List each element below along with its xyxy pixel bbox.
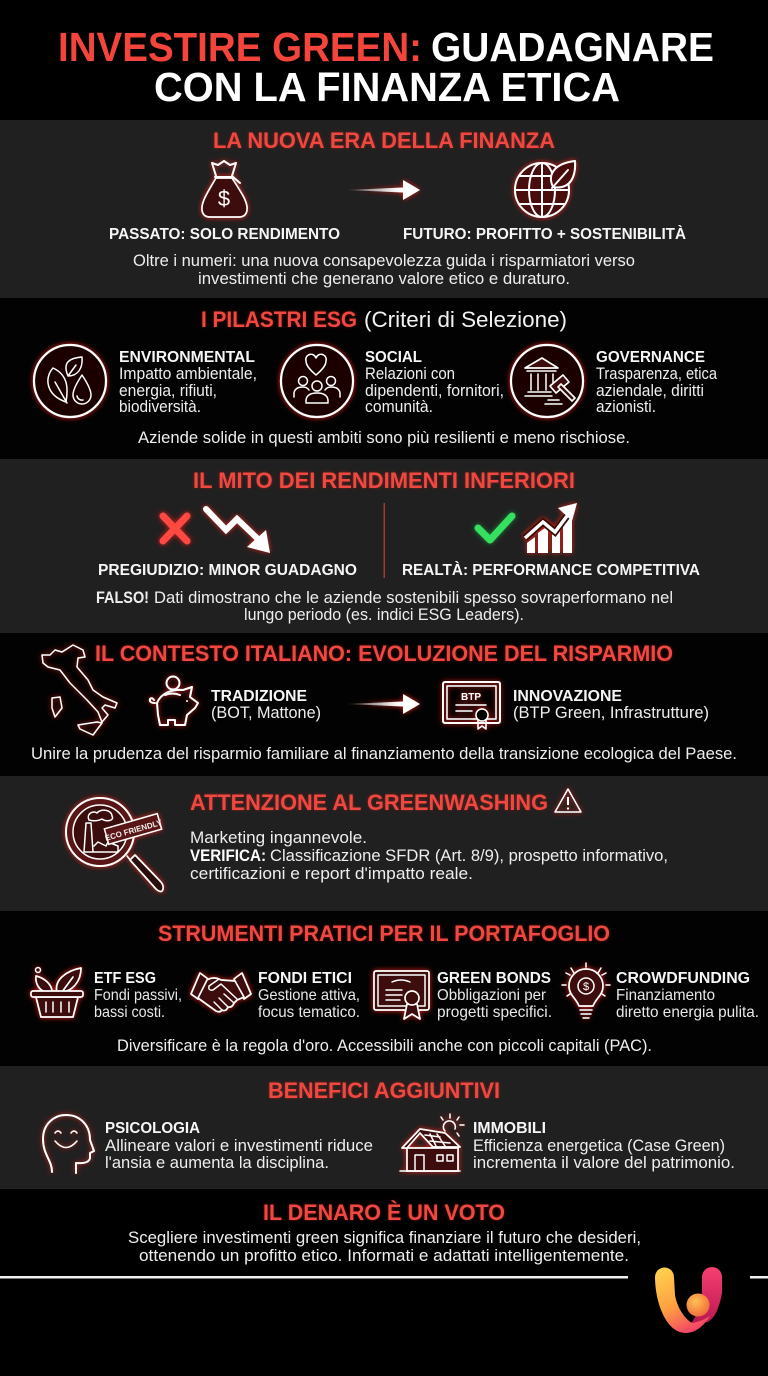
text block: falso: lungo periodo (es. indici ESG Leaders). bbox=[244, 606, 524, 624]
text block: environmental: energia, rifiuti, bbox=[119, 382, 217, 400]
icon: magnifier with fake label: ECO FRIENDLY bbox=[104, 818, 164, 843]
text block: falso: Dati dimostrano che le aziende sostenibili spesso sovraperformano nel bbox=[154, 589, 673, 607]
text block: governance: aziendale, diritti bbox=[596, 382, 704, 400]
text block: social: comunità. bbox=[365, 398, 433, 416]
text block: greenwashing bbox=[190, 829, 668, 883]
arrow: tradition to innovation bbox=[347, 694, 420, 714]
text block: immobili bbox=[473, 1120, 735, 1172]
text block: etf esg bbox=[94, 970, 182, 1021]
title: INVESTIRE GREEN: bbox=[58, 24, 422, 70]
icon: environmental bbox=[34, 345, 106, 417]
text block: falso bbox=[96, 589, 673, 624]
text block: fondi etici: focus tematico. bbox=[258, 1004, 360, 1021]
title: GUADAGNARE bbox=[431, 24, 714, 70]
panel: greenwashing bbox=[0, 776, 768, 911]
panel: benefici aggiuntivi bbox=[0, 1066, 768, 1189]
text block: conclusion bbox=[128, 1229, 641, 1265]
icon: green house bbox=[400, 1114, 464, 1171]
text block: psicologia: PSICOLOGIA bbox=[105, 1120, 200, 1137]
text block: conclusion: ottenendo un profitto etico. Informati e adattati intelligentemente. bbox=[139, 1247, 629, 1265]
icon: light bulb bbox=[562, 963, 610, 1018]
text block: green bonds: Obbligazioni per bbox=[437, 987, 547, 1004]
panel: strumenti pratici bbox=[0, 911, 768, 1066]
text block: strumenti note: Diversificare è la regola d'oro. Accessibili anche con piccoli capitali (PAC). bbox=[117, 1037, 652, 1055]
label: realta: REALTÀ: PERFORMANCE COMPETITIVA bbox=[402, 560, 700, 579]
icon: governance bbox=[511, 345, 583, 417]
text block: intro: Oltre i numeri: una nuova consapevolezza guida i risparmiatori verso bbox=[133, 252, 635, 270]
panel: pilastri esg bbox=[0, 298, 768, 459]
text block: green bonds: GREEN BONDS bbox=[437, 970, 551, 987]
text block: environmental: Impatto ambientale, bbox=[119, 365, 257, 383]
heading: benefici: BENEFICI AGGIUNTIVI bbox=[268, 1078, 500, 1103]
panel: il denaro e un voto bbox=[0, 1189, 768, 1376]
text block: greenwashing: Classificazione SFDR (Art. 8/9), prospetto informativo, bbox=[270, 847, 668, 865]
icon: social bbox=[281, 345, 353, 417]
heading: mito: IL MITO DEI RENDIMENTI INFERIORI bbox=[193, 468, 575, 493]
icon: green bond certificate bbox=[374, 971, 429, 1019]
icon: smiling head bbox=[43, 1115, 94, 1173]
text block: crowdfunding bbox=[616, 970, 759, 1021]
heading: pilastri esg: I PILASTRI ESG bbox=[201, 307, 357, 332]
icon: warning triangle bbox=[555, 789, 581, 812]
text block: environmental: biodiversità. bbox=[119, 398, 201, 416]
text block: falso: FALSO! bbox=[96, 589, 149, 607]
icon: money bag bbox=[202, 161, 247, 217]
text block: governance: azionisti. bbox=[596, 398, 656, 416]
title: CON LA FINANZA ETICA bbox=[154, 64, 620, 110]
footer rule bbox=[0, 1276, 768, 1278]
text block: greenwashing: certificazioni e report d'impatto reale. bbox=[190, 865, 473, 883]
text block: environmental bbox=[119, 349, 257, 416]
text block: governance bbox=[596, 349, 718, 416]
icon: green check bbox=[478, 516, 512, 540]
text block: crowdfunding: Finanziamento bbox=[616, 987, 715, 1004]
text block: etf esg: Fondi passivi, bbox=[94, 987, 182, 1004]
icon: light bulb: $ bbox=[583, 981, 589, 993]
arrow: past to future bbox=[347, 180, 420, 200]
text block: innovazione: (BTP Green, Infrastrutture) bbox=[513, 704, 709, 722]
icon: btp certificate: BTP bbox=[461, 692, 481, 703]
icon: logo bbox=[655, 1267, 722, 1333]
heading: contesto italiano: IL CONTESTO ITALIANO: EVOLUZIONE DEL RISPARMIO bbox=[95, 641, 673, 666]
heading: la nuova era: LA NUOVA ERA DELLA FINANZA bbox=[213, 128, 555, 153]
text block: crowdfunding: diretto energia pulita. bbox=[616, 1004, 759, 1021]
panel: il mito dei rendimenti inferiori bbox=[0, 459, 768, 633]
icon: globe with leaf bbox=[515, 161, 575, 217]
icon: red cross bbox=[163, 516, 187, 541]
text block: psicologia: l'ansia e aumenta la disciplina. bbox=[105, 1154, 329, 1172]
text block: tradizione: (BOT, Mattone) bbox=[211, 704, 321, 722]
icon: piggy bank bbox=[150, 676, 198, 725]
icon: money bag: $ bbox=[218, 186, 230, 211]
text block: tradizione: TRADIZIONE bbox=[211, 688, 307, 705]
icon: handshake bbox=[191, 973, 251, 1012]
icon: growth chart bbox=[525, 503, 577, 553]
heading: pilastri esg: (Criteri di Selezione) bbox=[364, 307, 567, 332]
text block: etf esg: ETF ESG bbox=[94, 970, 156, 987]
text block: social bbox=[365, 349, 504, 416]
text block: psicologia: Allineare valori e investimenti riduce bbox=[105, 1137, 373, 1155]
text block: tradizione bbox=[211, 688, 321, 722]
heading: strumenti: STRUMENTI PRATICI PER IL PORTAFOGLIO bbox=[158, 921, 610, 946]
text block: esg note: Aziende solide in questi ambiti sono più resilienti e meno rischiose. bbox=[138, 429, 630, 447]
icon: magnifier with fake label bbox=[66, 798, 164, 892]
text block: social: SOCIAL bbox=[365, 349, 422, 366]
text block: social: Relazioni con bbox=[365, 365, 455, 383]
label: passato: PASSATO: SOLO RENDIMENTO bbox=[109, 226, 340, 243]
text block: psicologia bbox=[105, 1120, 373, 1172]
text block: environmental: ENVIRONMENTAL bbox=[119, 349, 255, 366]
text block: green bonds: progetti specifici. bbox=[437, 1004, 552, 1021]
title bbox=[0, 0, 768, 120]
text block: fondi etici: FONDI ETICI bbox=[258, 970, 352, 987]
text block: greenwashing: VERIFICA: bbox=[190, 847, 266, 865]
text block: governance: Trasparenza, etica bbox=[596, 365, 718, 383]
text block: intro: investimenti che generano valore etico e duraturo. bbox=[198, 270, 570, 288]
text block: crowdfunding: CROWDFUNDING bbox=[616, 970, 750, 987]
text block: innovazione bbox=[513, 688, 709, 722]
text block: immobili: Efficienza energetica (Case Green) bbox=[473, 1137, 725, 1155]
divider bbox=[384, 503, 385, 578]
text block: governance: GOVERNANCE bbox=[596, 349, 705, 366]
text block: social: dipendenti, fornitori, bbox=[365, 382, 504, 400]
text block: conclusion: Scegliere investimenti green significa finanziare il futuro che desideri, bbox=[128, 1229, 641, 1247]
heading: pilastri esg bbox=[201, 307, 567, 332]
text block: fondi etici: Gestione attiva, bbox=[258, 987, 360, 1004]
label: pregiudizio: PREGIUDIZIO: MINOR GUADAGNO bbox=[98, 562, 357, 579]
label: futuro: FUTURO: PROFITTO + SOSTENIBILITÀ bbox=[403, 224, 686, 243]
text block: greenwashing: Marketing ingannevole. bbox=[190, 829, 367, 847]
text block: fondi etici bbox=[258, 970, 360, 1021]
icon: basket bbox=[31, 968, 83, 1017]
panel: la nuova era della finanza bbox=[0, 120, 768, 298]
text block: innovazione: INNOVAZIONE bbox=[513, 688, 622, 705]
heading: denaro: IL DENARO È UN VOTO bbox=[263, 1200, 505, 1225]
text block: immobili: incrementa il valore del patrimonio. bbox=[473, 1154, 735, 1172]
text block: etf esg: bassi costi. bbox=[94, 1004, 165, 1021]
text block: contesto note: Unire la prudenza del risparmio familiare al finanziamento della transizione ecologica del Paese. bbox=[31, 745, 737, 763]
text block: green bonds bbox=[437, 970, 552, 1021]
text block: intro bbox=[133, 252, 635, 288]
panel: contesto italiano bbox=[0, 633, 768, 776]
text block: immobili: IMMOBILI bbox=[473, 1120, 546, 1137]
icon: falling arrow bbox=[206, 509, 270, 553]
heading: greenwashing: ATTENZIONE AL GREENWASHING bbox=[190, 790, 548, 815]
icon: btp certificate bbox=[443, 682, 500, 729]
icon: italy map bbox=[42, 645, 117, 735]
